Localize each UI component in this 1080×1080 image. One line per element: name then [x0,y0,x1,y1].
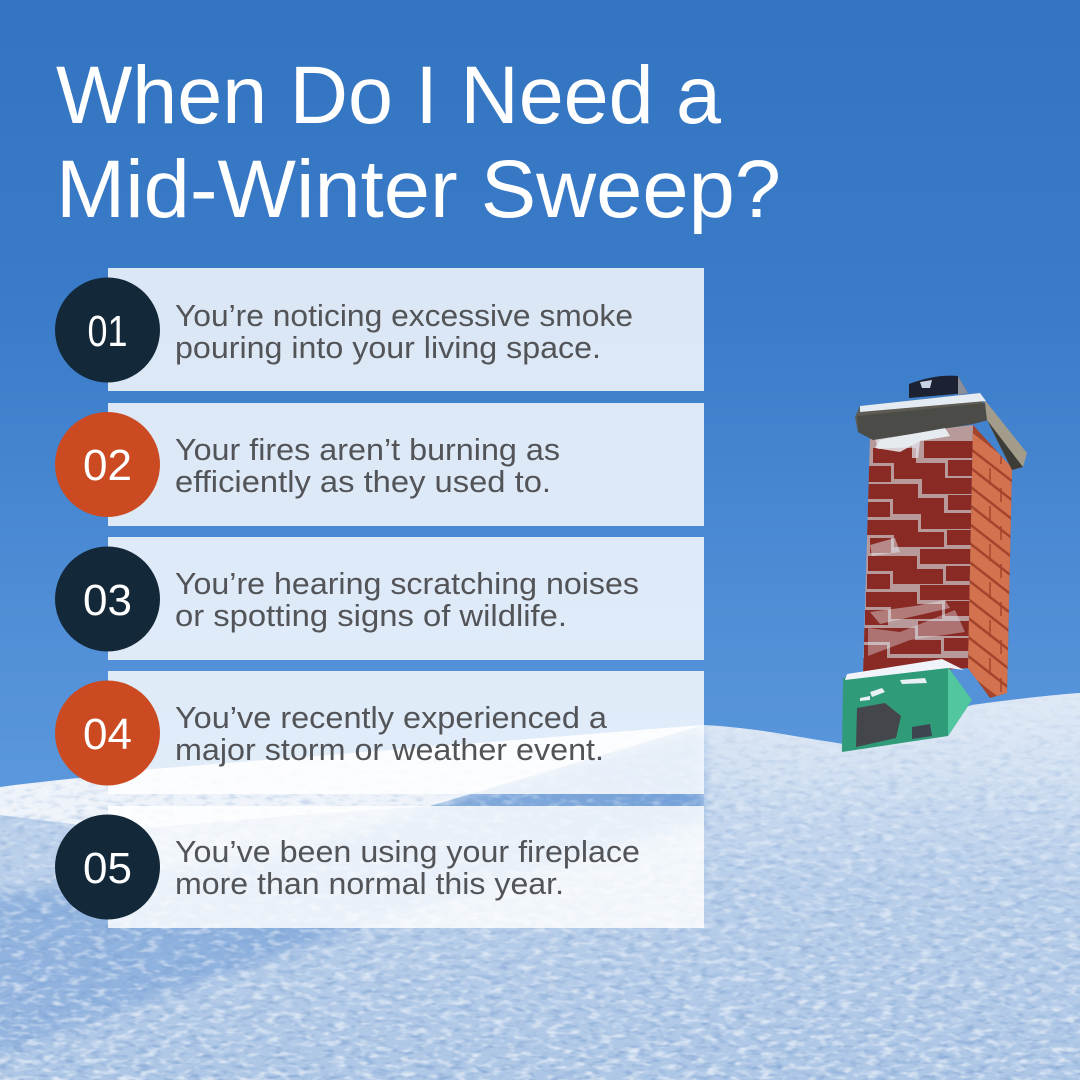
text 02 [175,432,560,499]
chimney [842,376,1027,752]
card 01 [108,268,704,391]
card 05 [108,806,704,928]
title: Mid-Winter Sweep? [56,144,781,235]
text 03: or spotting signs of wildlife. [175,598,567,633]
item 05 [55,806,704,928]
badge 02 [55,412,160,517]
text 02: Your fires aren’t burning as [175,432,560,467]
item 02 [55,403,704,526]
chimney front brickwork [863,425,973,672]
text 05 [175,834,640,901]
item 03 [55,537,704,660]
text 01: pouring into your living space. [175,330,601,365]
green metal flashing box [842,659,972,752]
badge 01 [55,278,160,382]
card 04 [108,671,704,794]
chimney flue cap [909,376,968,398]
badge 05: 05 [83,844,132,893]
card 02 [108,403,704,526]
sky [0,0,1080,800]
text 01 [175,298,633,365]
chimney concrete cap [855,393,1027,470]
text 04 [175,700,608,767]
badge 02: 02 [83,441,132,490]
text 01: You’re noticing excessive smoke [175,298,633,333]
text 04: major storm or weather event. [175,732,604,767]
text 03 [175,566,639,633]
badge 01: 01 [88,307,128,356]
chimney side brickwork [968,425,1012,698]
card 03 [108,537,704,660]
title [56,50,781,235]
badge 04: 04 [83,710,132,759]
text 05: more than normal this year. [175,866,564,901]
text 02: efficiently as they used to. [175,464,551,499]
text 03: You’re hearing scratching noises [175,566,639,601]
item 04 [55,671,704,794]
badge 05 [55,814,160,920]
title: When Do I Need a [56,50,721,141]
badge 03: 03 [83,576,132,625]
badge 04 [55,680,160,786]
snow drift [0,690,1080,1080]
badge 03 [55,546,160,652]
text 05: You’ve been using your fireplace [175,834,640,869]
text 04: You’ve recently experienced a [175,700,608,735]
item 01 [55,268,704,391]
